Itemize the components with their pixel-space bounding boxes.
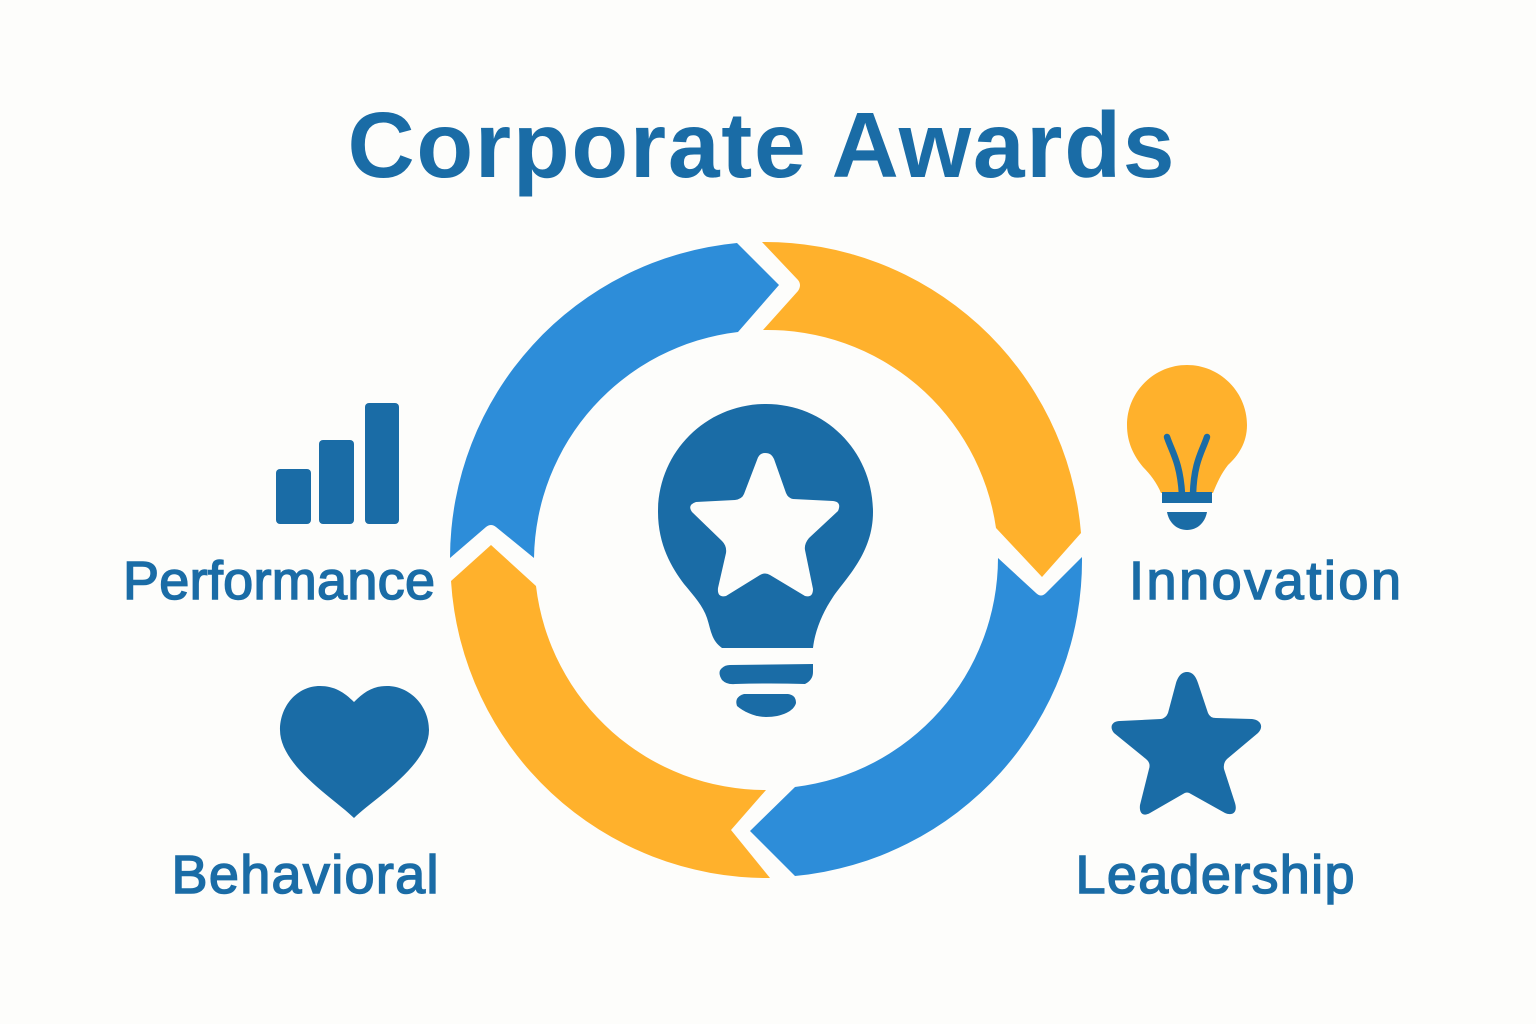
label: Behavioral: Behavioral (172, 845, 438, 905)
label: Innovation: Innovation (1129, 551, 1401, 611)
bulb base upper (720, 664, 813, 684)
title: Corporate Awards (348, 93, 1174, 197)
band (1162, 492, 1212, 503)
bulb base lower (736, 694, 796, 717)
arc: orange upper right (762, 242, 1081, 577)
arc: blue lower right (750, 557, 1082, 876)
bulb body (658, 404, 873, 648)
icon: heart (280, 686, 429, 818)
cycle ring (450, 242, 1082, 878)
arc: orange lower left (451, 545, 770, 878)
icon: performance bars (276, 403, 399, 524)
small bulb glass (1127, 365, 1247, 493)
icon: star (1112, 672, 1261, 815)
label: Leadership: Leadership (1076, 845, 1354, 905)
arc: blue upper left (450, 243, 779, 558)
icon: innovation bulb (1127, 365, 1247, 530)
filaments (1167, 437, 1207, 494)
cap (1167, 512, 1207, 530)
label: Performance: Performance (123, 551, 435, 611)
icon: central light bulb with star (658, 404, 873, 717)
star cut-out (690, 453, 839, 596)
